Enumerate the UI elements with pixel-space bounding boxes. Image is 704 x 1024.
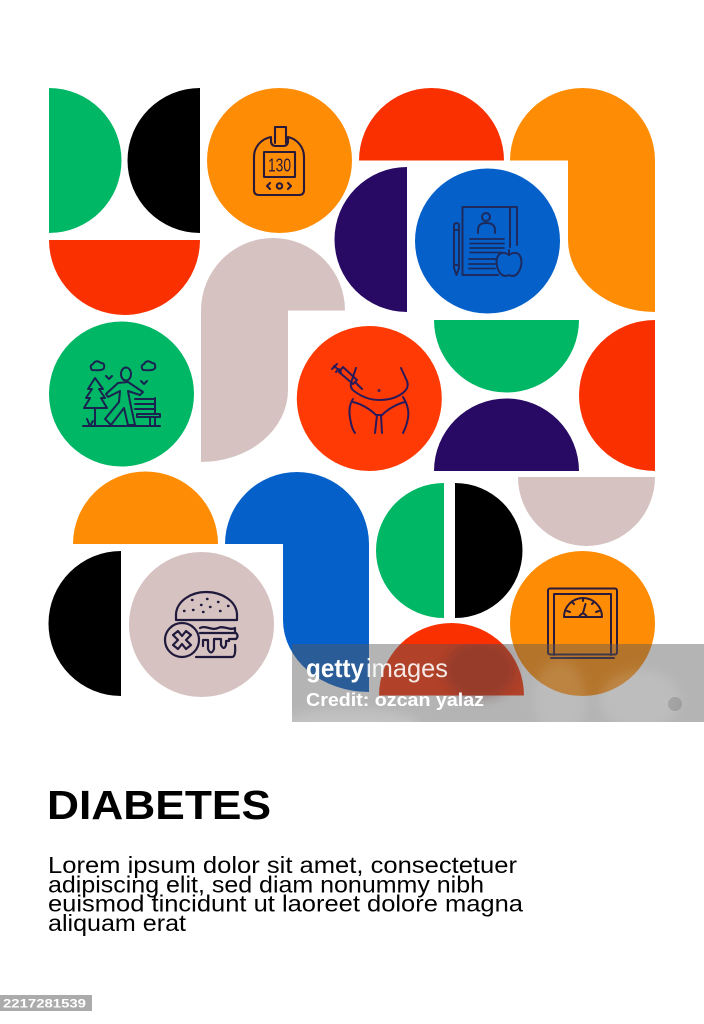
body text xyxy=(48,852,524,936)
shape: mauve burger circle xyxy=(129,552,274,697)
shape: orange arch xyxy=(510,88,655,312)
shape: red dome bottom xyxy=(379,623,524,696)
watermark: getty images banner xyxy=(292,644,704,722)
shape: black half circle xyxy=(128,88,200,233)
image id tag: 2217281539 xyxy=(3,996,86,1010)
shape: red half circle under green xyxy=(49,240,200,315)
shape: green half circle xyxy=(49,88,122,233)
body text: Lorem ipsum dolor sit amet, consectetuer xyxy=(48,852,517,878)
title: DIABETES xyxy=(47,782,271,828)
icon: walking in the park xyxy=(83,361,160,426)
shape: blue diet plan circle xyxy=(415,168,560,314)
body text: aliquam erat xyxy=(48,910,186,936)
image id tag xyxy=(0,995,92,1011)
shape: black half circle bottom xyxy=(48,551,121,696)
shape: red half circle right xyxy=(579,320,655,471)
shape: green exercise circle xyxy=(49,322,194,466)
shape: black half circle middle xyxy=(455,483,522,618)
shape: orange dome xyxy=(73,472,218,544)
shape: mauve bowl xyxy=(518,477,655,546)
shape: green bowl half circle xyxy=(434,320,579,392)
icon: burger crossed out xyxy=(165,592,238,657)
body text: adipiscing elit, sed diam nonummy nibh xyxy=(48,872,484,898)
shape: purple dome xyxy=(434,398,579,471)
icon: weight scale xyxy=(548,588,617,658)
icon: glucose meter xyxy=(254,127,304,195)
watermark credit: Credit: ozcan yalaz xyxy=(306,689,484,710)
icon: diet plan document xyxy=(454,207,521,276)
shape: red injection circle xyxy=(297,326,442,471)
shape: green half circle middle xyxy=(376,483,444,618)
shape: orange scale circle xyxy=(510,551,655,696)
icon: insulin injection xyxy=(332,364,408,433)
shape: purple half circle xyxy=(334,167,407,312)
shape: mauve arch xyxy=(201,238,345,462)
icon: glucose meter: 130 xyxy=(268,156,291,176)
body text: euismod tincidunt ut laoreet dolore magna xyxy=(48,890,524,916)
shape: red half circle top xyxy=(359,88,504,160)
shape: blue arch xyxy=(225,472,369,692)
watermark brand text: getty xyxy=(306,653,364,683)
watermark images text: images xyxy=(366,653,448,683)
shape: orange glucose circle xyxy=(207,88,352,233)
